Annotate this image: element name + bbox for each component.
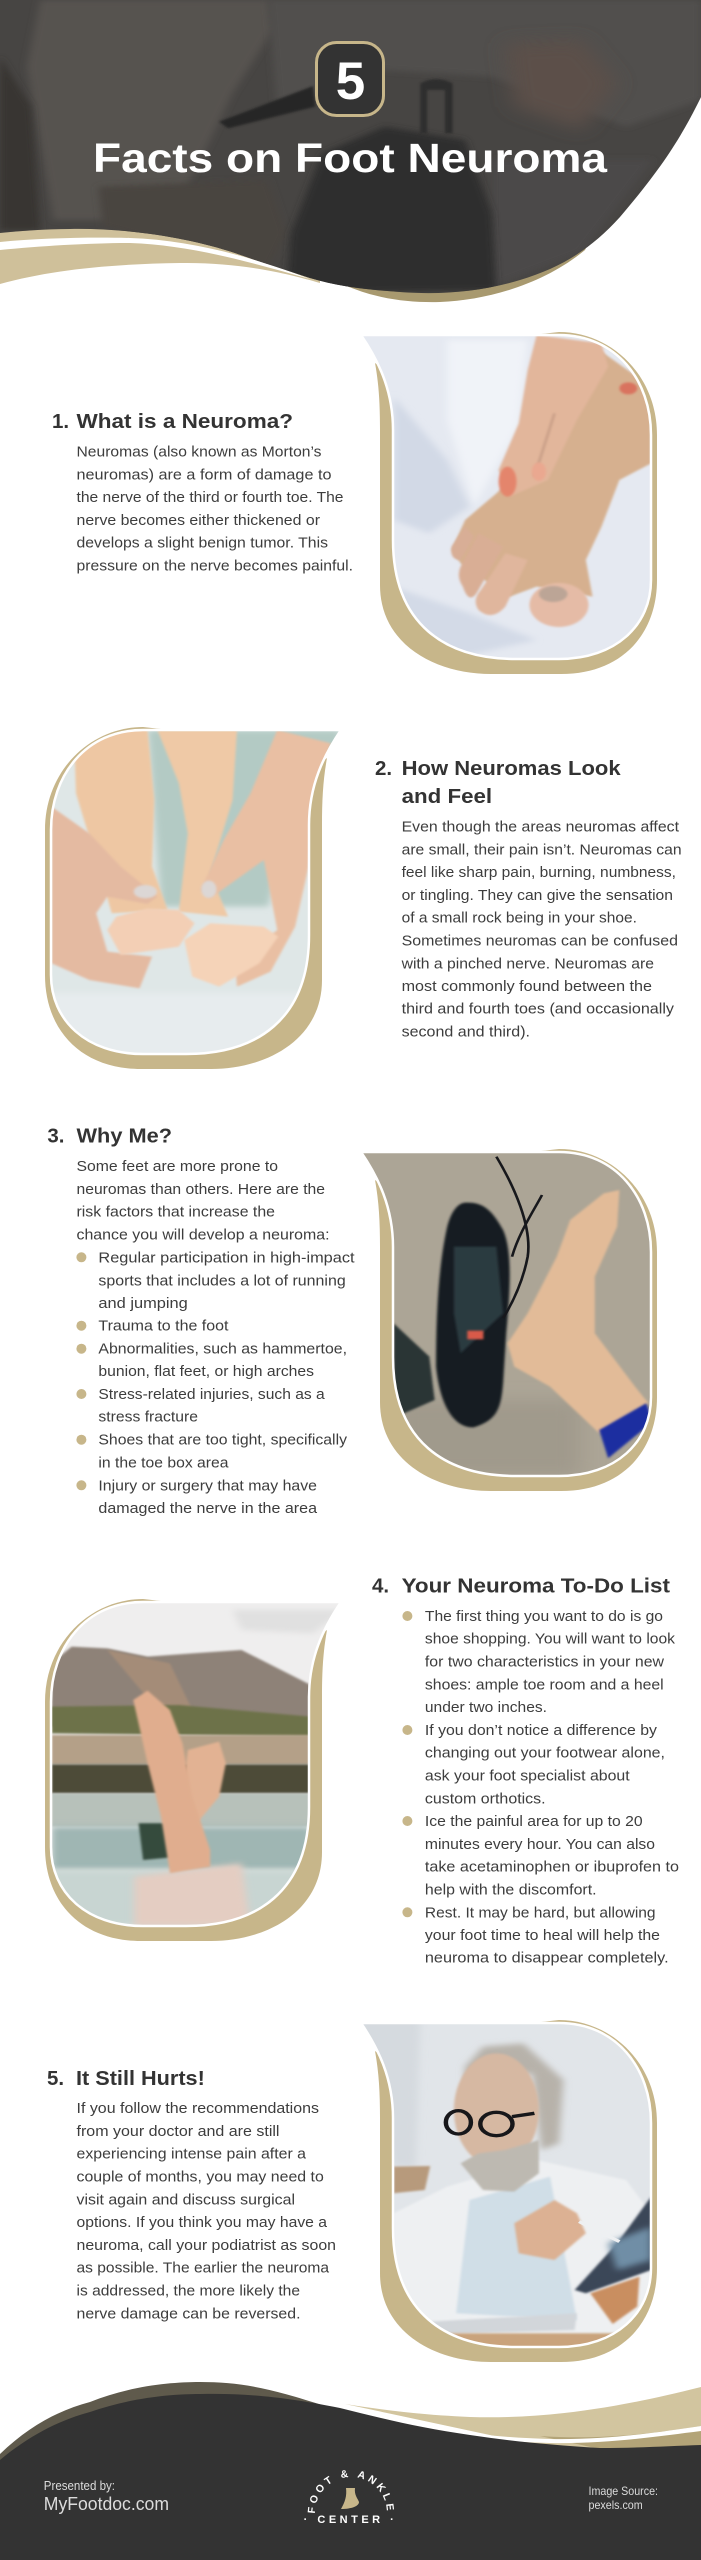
body text 2: of a small rock being in your shoe. <box>402 911 637 927</box>
heading 2 <box>375 757 621 808</box>
heading 3: Why Me? <box>76 1125 172 1148</box>
risk factor bullet list: sports that includes a lot of running <box>98 1273 346 1289</box>
intro text 3: chance you will develop a neuroma: <box>76 1228 330 1244</box>
heading 2: How Neuromas Look <box>402 757 621 780</box>
heading 1: What is a Neuroma? <box>76 410 293 433</box>
photo 2: hands holding feet <box>36 727 349 1069</box>
risk factor bullet list: stress fracture <box>98 1410 198 1426</box>
gold ribbon left <box>0 225 320 284</box>
intro text 3: neuromas than others. Here are the <box>76 1182 325 1198</box>
to-do bullet list: ask your foot specialist about <box>425 1769 630 1785</box>
body text 2: feel like sharp pain, burning, numbness, <box>402 865 676 881</box>
body text 2: with a pinched nerve. Neuromas are <box>401 956 654 972</box>
body text 2 <box>401 820 682 1040</box>
to-do bullet list: under two inches. <box>425 1700 547 1716</box>
to-do bullet list: The first thing you want to do is go <box>425 1609 663 1625</box>
photo 4: feet in water <box>36 1597 349 1941</box>
body text 5: is addressed, the more likely the <box>76 2283 300 2299</box>
body text 5: couple of months, you may need to <box>76 2170 324 2186</box>
risk factor bullet list: Shoes that are too tight, specifically <box>98 1433 348 1449</box>
intro text 3: risk factors that increase the <box>76 1205 275 1221</box>
panel: what is a neuroma <box>52 330 666 674</box>
heading 3: 3. <box>47 1125 65 1148</box>
presented by <box>44 2479 169 2514</box>
badge: number 5 <box>316 42 384 116</box>
to-do bullet list: shoes: ample toe room and a heel <box>425 1677 664 1693</box>
heading 5: It Still Hurts! <box>76 2067 205 2090</box>
title: Facts on Foot Neuroma <box>93 135 608 181</box>
risk factor bullet list: in the toe box area <box>98 1455 230 1471</box>
body text 2: or tingling. They can give the sensation <box>402 888 673 904</box>
risk factor bullet list: Trauma to the foot <box>98 1319 229 1335</box>
body text 2: third and fourth toes (and occasionally <box>402 1002 675 1018</box>
panel: your neuroma to-do list <box>36 1575 679 1967</box>
badge: number 5: 5 <box>336 52 365 111</box>
body text 5: neuroma, call your podiatrist as soon <box>76 2238 336 2254</box>
risk factor bullet list <box>76 1250 355 1517</box>
heading 5: 5. <box>47 2067 64 2090</box>
body text 5: from your doctor and are still <box>76 2124 280 2140</box>
to-do bullet list: shoe shopping. You will want to look <box>425 1632 676 1648</box>
footer <box>0 2382 701 2560</box>
to-do bullet list: changing out your footwear alone, <box>425 1746 665 1762</box>
to-do bullet list: your foot time to heal will help the <box>425 1928 660 1944</box>
icon: foot <box>341 2488 359 2509</box>
body text 2: are small, their pain isn’t. Neuromas can <box>402 842 682 858</box>
body text 5: nerve damage can be reversed. <box>76 2306 300 2322</box>
heading 1: 1. <box>52 410 69 433</box>
to-do bullet list: neuroma to disappear completely. <box>425 1951 669 1967</box>
body text 5: If you follow the recommendations <box>76 2101 319 2117</box>
body text 5: options. If you think you may have a <box>76 2215 328 2231</box>
presented by: MyFootdoc.com <box>44 2494 169 2514</box>
panel: how neuromas look and feel <box>36 727 682 1069</box>
body text 1: nerve becomes either thickened or <box>76 513 320 529</box>
to-do bullet list: minutes every hour. You can also <box>425 1837 655 1853</box>
image source <box>588 2484 658 2512</box>
body text 5: as possible. The earlier the neuroma <box>76 2261 330 2277</box>
risk factor bullet list: damaged the nerve in the area <box>98 1501 318 1517</box>
olive swoosh <box>0 2382 325 2470</box>
risk factor bullet list: Injury or surgery that may have <box>98 1478 317 1494</box>
photo 3: shoe and bare foot <box>353 1147 666 1491</box>
body text 5: experiencing intense pain after a <box>76 2147 307 2163</box>
gold ribbon under header <box>315 220 600 302</box>
risk factor bullet list: Abnormalities, such as hammertoe, <box>98 1342 347 1358</box>
to-do bullet list: Ice the painful area for up to 20 <box>425 1814 643 1830</box>
to-do bullet list: Rest. It may be hard, but allowing <box>425 1905 656 1921</box>
body text 1 <box>76 445 353 575</box>
body text 1: the nerve of the third or fourth toe. The <box>76 490 344 506</box>
to-do bullet list: custom orthotics. <box>425 1791 546 1807</box>
risk factor bullet list: Stress-related injuries, such as a <box>98 1387 326 1403</box>
header photo background <box>0 0 701 310</box>
heading 2: and Feel <box>402 785 492 808</box>
gold ribbon right <box>345 2387 701 2450</box>
risk factor bullet list: Regular participation in high-impact <box>98 1250 355 1266</box>
risk factor bullet list: bunion, flat feet, or high arches <box>98 1364 314 1380</box>
intro text 3: Some feet are more prone to <box>76 1159 278 1175</box>
image source: Image Source: <box>588 2484 658 2498</box>
panel: why me <box>47 1125 666 1517</box>
white ribbon stripe <box>345 2404 701 2443</box>
body text 1: develops a slight benign tumor. This <box>76 536 328 552</box>
body text 5 <box>76 2101 336 2322</box>
to-do bullet list: for two characteristics in your new <box>425 1654 665 1670</box>
heading 2: 2. <box>375 757 392 780</box>
white ribbon stripe <box>0 238 310 279</box>
darker gold ribbon edge <box>540 2426 701 2449</box>
to-do bullet list: take acetaminophen or ibuprofen to <box>425 1860 679 1876</box>
to-do bullet list: help with the discomfort. <box>425 1882 597 1898</box>
intro text 3 <box>76 1159 330 1244</box>
footer dark base <box>0 2394 701 2560</box>
body text 1: neuromas) are a form of damage to <box>76 467 332 483</box>
body text 2: Even though the areas neuromas affect <box>402 820 679 836</box>
body text 2: Sometimes neuromas can be confused <box>402 933 678 949</box>
heading 4: Your Neuroma To-Do List <box>402 1575 670 1598</box>
panel: it still hurts <box>47 2017 666 2362</box>
body text 2: second and third). <box>402 1024 530 1040</box>
logo: foot and ankle center: · CENTER · <box>304 2514 397 2526</box>
header banner <box>0 0 701 310</box>
photo 5: doctor with x-ray <box>353 2017 666 2362</box>
body text 2: most commonly found between the <box>402 979 652 995</box>
to-do bullet list: If you don’t notice a difference by <box>425 1723 658 1739</box>
presented by: Presented by: <box>44 2479 115 2493</box>
heading 4: 4. <box>372 1575 389 1598</box>
body text 1: pressure on the nerve becomes painful. <box>76 559 353 575</box>
logo: foot and ankle center: FOOT & ANKLE <box>308 2470 394 2513</box>
to-do bullet list <box>402 1609 679 1967</box>
photo 1: hand on foot <box>353 330 666 674</box>
risk factor bullet list: and jumping <box>98 1296 188 1312</box>
image source: pexels.com <box>588 2498 643 2512</box>
body text 5: visit again and discuss surgical <box>76 2192 295 2208</box>
body text 1: Neuromas (also known as Morton’s <box>76 445 322 461</box>
